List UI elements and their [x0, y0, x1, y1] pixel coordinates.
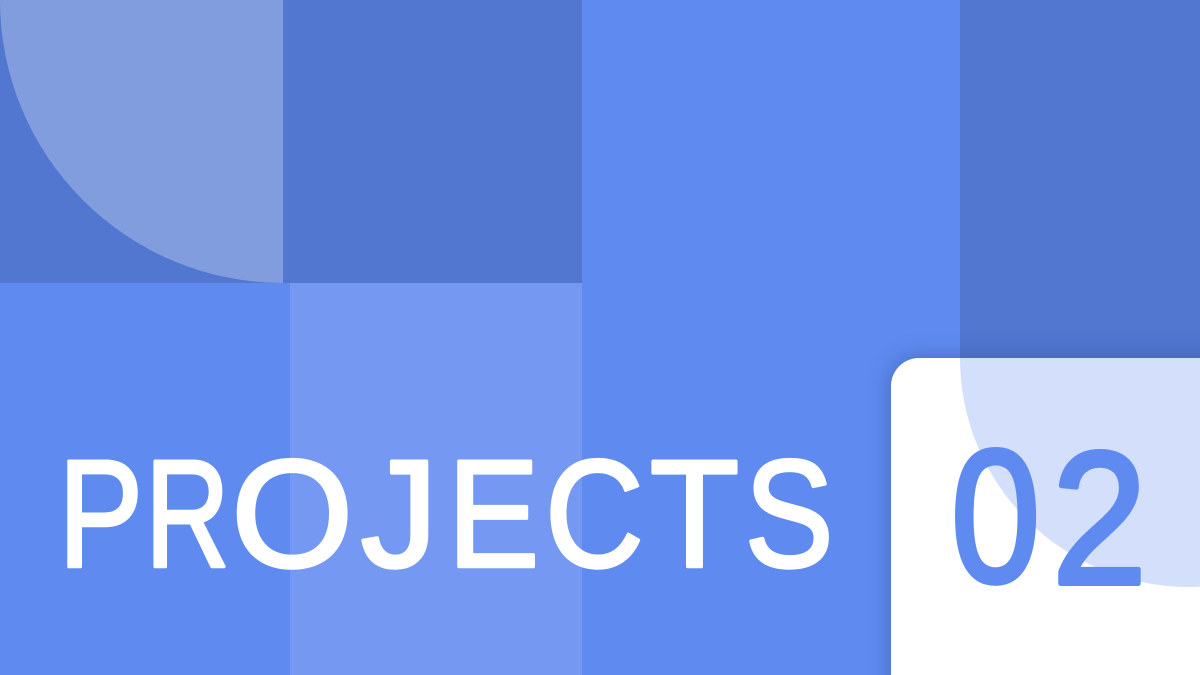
title: PROJECTS: R: [145, 428, 230, 599]
tile: top centre dark: [283, 0, 582, 283]
tile: bottom left blue: [0, 283, 290, 675]
section number: 02: 2: [1052, 414, 1147, 624]
title: PROJECTS: E: [448, 428, 539, 599]
tile: top left dark: [0, 0, 283, 283]
quarter circle decoration: [0, 0, 283, 283]
title: PROJECTS: P: [58, 428, 143, 599]
title: PROJECTS: J: [361, 428, 438, 599]
title: PROJECTS: C: [545, 428, 644, 599]
tile: top right dark: [960, 0, 1200, 400]
section number: 02: 0: [951, 411, 1040, 622]
title: PROJECTS: O: [231, 428, 353, 599]
quarter circle on card: [960, 129, 1200, 587]
title: PROJECTS: T: [650, 428, 739, 599]
tile: tall centre blue: [582, 0, 960, 675]
panel: white number card: [891, 358, 1200, 675]
tile: bottom centre light blue: [290, 283, 582, 675]
title: PROJECTS: S: [745, 429, 833, 600]
